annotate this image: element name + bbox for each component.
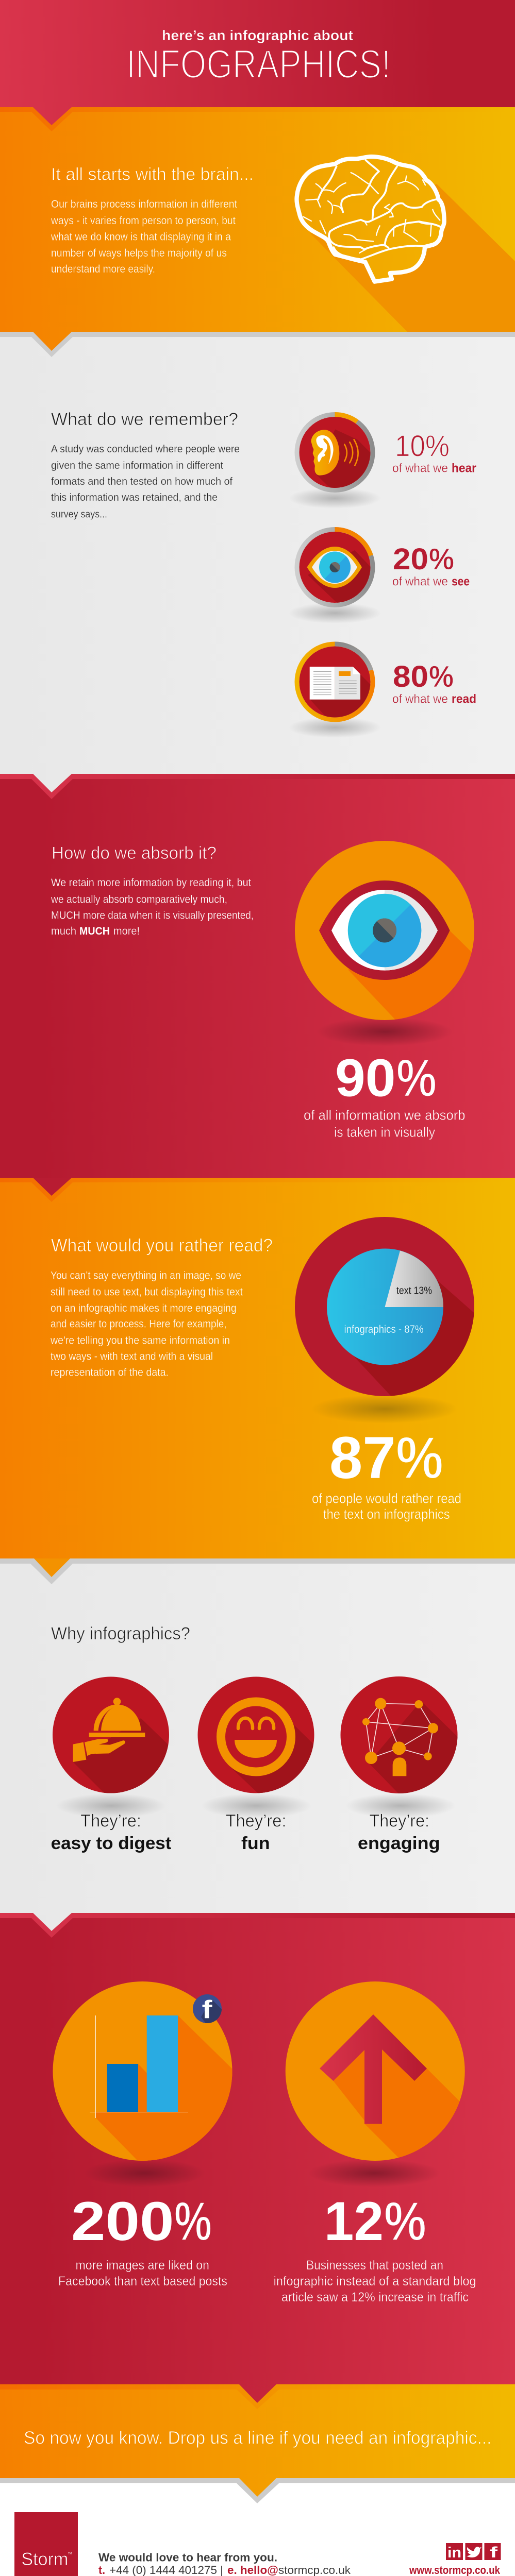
icon: smiley	[198, 1676, 317, 1818]
panel: how do we absorb it	[0, 774, 515, 1178]
chart: bar chart with facebook badge	[53, 1981, 235, 2187]
stat: 10%: 10%	[395, 430, 450, 463]
stat: 20%	[392, 543, 470, 588]
heading: here's an infographic about: here’s an infographic about	[162, 27, 353, 43]
caption: 87%	[312, 1491, 461, 1522]
panel: footer	[0, 2478, 515, 2576]
stat: 12%: 12	[324, 2190, 384, 2252]
icon: large eye	[295, 841, 477, 1046]
icon: book badge	[295, 642, 375, 736]
icons: social: f	[490, 2544, 498, 2561]
caption: 12%: Businesses that posted an	[306, 2258, 443, 2273]
text block: absorb copy: more!	[113, 925, 140, 937]
caption: fun: fun	[241, 1834, 270, 1853]
text block: absorb copy: We retain more information by reading it, but	[51, 877, 251, 889]
panel: call to action	[0, 2384, 515, 2478]
stat: 20%: of what we	[392, 575, 448, 588]
stat: 12%	[324, 2190, 426, 2252]
contact details	[98, 2551, 351, 2576]
stat: 20%: see	[452, 575, 470, 588]
panel: what would you rather read	[0, 1178, 515, 1558]
heading: why: Why infographics?	[51, 1624, 190, 1643]
icon: eye badge	[295, 527, 375, 622]
caption: easy to digest: easy to digest	[51, 1834, 171, 1853]
panel: header	[0, 0, 515, 107]
stat: 200%	[71, 2190, 212, 2252]
stat: 80%: 80	[393, 660, 428, 693]
caption: 12%: infographic instead of a standard blog	[274, 2274, 476, 2289]
stat: 87%	[329, 1425, 443, 1491]
caption: 200%: Facebook than text based posts	[58, 2274, 227, 2289]
icon: facebook f: f	[202, 1996, 212, 2024]
icon: cloche and hand	[53, 1676, 170, 1818]
stat: 20%: 20	[393, 543, 428, 576]
caption: engaging	[358, 1811, 440, 1853]
heading: brain: It all starts with the brain...	[51, 165, 254, 184]
text block: study copy: given the same information in different	[51, 460, 223, 471]
text block: study copy: formats and then tested on how much of	[51, 476, 232, 487]
stat: 80%: of what we	[392, 692, 448, 706]
logo: Storm: Storm	[21, 2549, 68, 2569]
text block: study copy: survey says...	[51, 508, 107, 520]
stat: 90%: 90	[335, 1048, 396, 1108]
text block: study copy	[51, 443, 240, 520]
caption: engaging: engaging	[358, 1834, 440, 1853]
caption: 200%: more images are liked on	[75, 2258, 209, 2273]
text block: brain copy	[51, 198, 237, 275]
text block: absorb copy: we actually absorb comparatively much,	[51, 893, 227, 906]
stat: 10%: hear	[452, 462, 476, 476]
stat: 10%	[392, 430, 476, 476]
text block: brain copy: what we do know is that displaying it in a	[51, 231, 231, 243]
caption: 12%	[274, 2258, 476, 2304]
title: INFOGRAPHICS!	[126, 41, 391, 87]
panel: what do we remember	[0, 332, 515, 774]
caption: easy to digest: They’re:	[80, 1811, 141, 1831]
label: text 13%: text 13%	[396, 1285, 432, 1297]
caption: 87%: of people would rather read	[312, 1491, 461, 1506]
caption: 200%	[58, 2258, 227, 2289]
logo: Storm	[14, 2512, 78, 2576]
stat: 10%: of what we	[392, 462, 448, 476]
panel: statistics	[0, 1913, 515, 2384]
text block: read copy: You can’t say everything in an image, so we	[51, 1270, 241, 1282]
text block: brain copy: Our brains process information in different	[51, 198, 237, 210]
stat: 12%: %	[384, 2190, 426, 2252]
icon: brain	[296, 157, 444, 282]
icons: social	[446, 2543, 501, 2561]
panel: why infographics	[0, 1558, 515, 1913]
icon: network	[340, 1676, 459, 1818]
text block: read copy: still need to use text, but displaying this text	[51, 1286, 243, 1298]
caption: 90%: of all information we absorb	[304, 1108, 465, 1123]
icon: up arrow	[286, 1981, 467, 2187]
stat: 87%: 87	[329, 1425, 396, 1491]
text block: read copy: and easier to process. Here for example,	[51, 1318, 227, 1330]
text block: absorb copy: MUCH more data when it is visually presented,	[51, 910, 254, 922]
panel: brain section	[0, 107, 515, 332]
caption: 12%: article saw a 12% increase in traffic	[281, 2290, 469, 2304]
stat: 80%	[392, 660, 476, 706]
stat: 87%: %	[396, 1425, 443, 1491]
contact details: We would love to hear from you.	[98, 2551, 277, 2564]
icon: ear badge	[295, 412, 375, 507]
text: so now you know: So now you know. Drop us a line if you need an infographic...	[24, 2428, 492, 2448]
text block: brain copy: ways - it varies from person to person, but	[51, 215, 236, 227]
stat: 20%: %	[429, 543, 454, 576]
caption: 90%: is taken in visually	[334, 1125, 435, 1140]
icons: social: in	[447, 2545, 461, 2561]
logo: Storm: TM	[68, 2552, 72, 2555]
text block: brain copy: understand more easily.	[51, 263, 155, 275]
label: infographics 87%: infographics - 87%	[344, 1324, 424, 1335]
text block: absorb copy	[51, 877, 254, 937]
caption: 90%	[304, 1108, 465, 1140]
stat: 200%: %	[174, 2190, 212, 2252]
heading: rather read: What would you rather read?	[51, 1235, 273, 1256]
caption: easy to digest	[51, 1811, 171, 1853]
text block: read copy: we're telling you the same information in	[50, 1335, 230, 1347]
text block: study copy: A study was conducted where people were	[51, 443, 240, 455]
long shadow: brain	[310, 184, 515, 332]
caption: 87%: the text on infographics	[323, 1506, 450, 1522]
text block: read copy: on an infographic makes it more engaging	[51, 1302, 237, 1314]
stat: 90%	[335, 1048, 437, 1108]
text block: read copy	[50, 1270, 243, 1379]
heading: absorb: How do we absorb it?	[52, 843, 217, 863]
stat: 80%: read	[452, 692, 476, 706]
text block: absorb copy: much	[51, 925, 76, 937]
stat: 200%: 200	[71, 2190, 174, 2252]
caption: fun: They’re:	[226, 1811, 286, 1831]
text block: read copy: two ways - with text and with a visual	[51, 1351, 213, 1363]
text block: read copy: representation of the data.	[51, 1367, 169, 1379]
stat: 90%: %	[396, 1048, 437, 1108]
chart: pie 87 / 13	[295, 1217, 477, 1423]
heading: remember: What do we remember?	[51, 410, 238, 429]
text block: brain copy: number of ways helps the majority of us	[51, 247, 227, 259]
text block: absorb copy: MUCH	[79, 925, 110, 937]
text block: study copy: this information was retained, and the	[51, 492, 218, 503]
stat: 80%: %	[429, 660, 454, 693]
caption: fun	[226, 1811, 286, 1853]
caption: engaging: They’re:	[369, 1811, 429, 1831]
